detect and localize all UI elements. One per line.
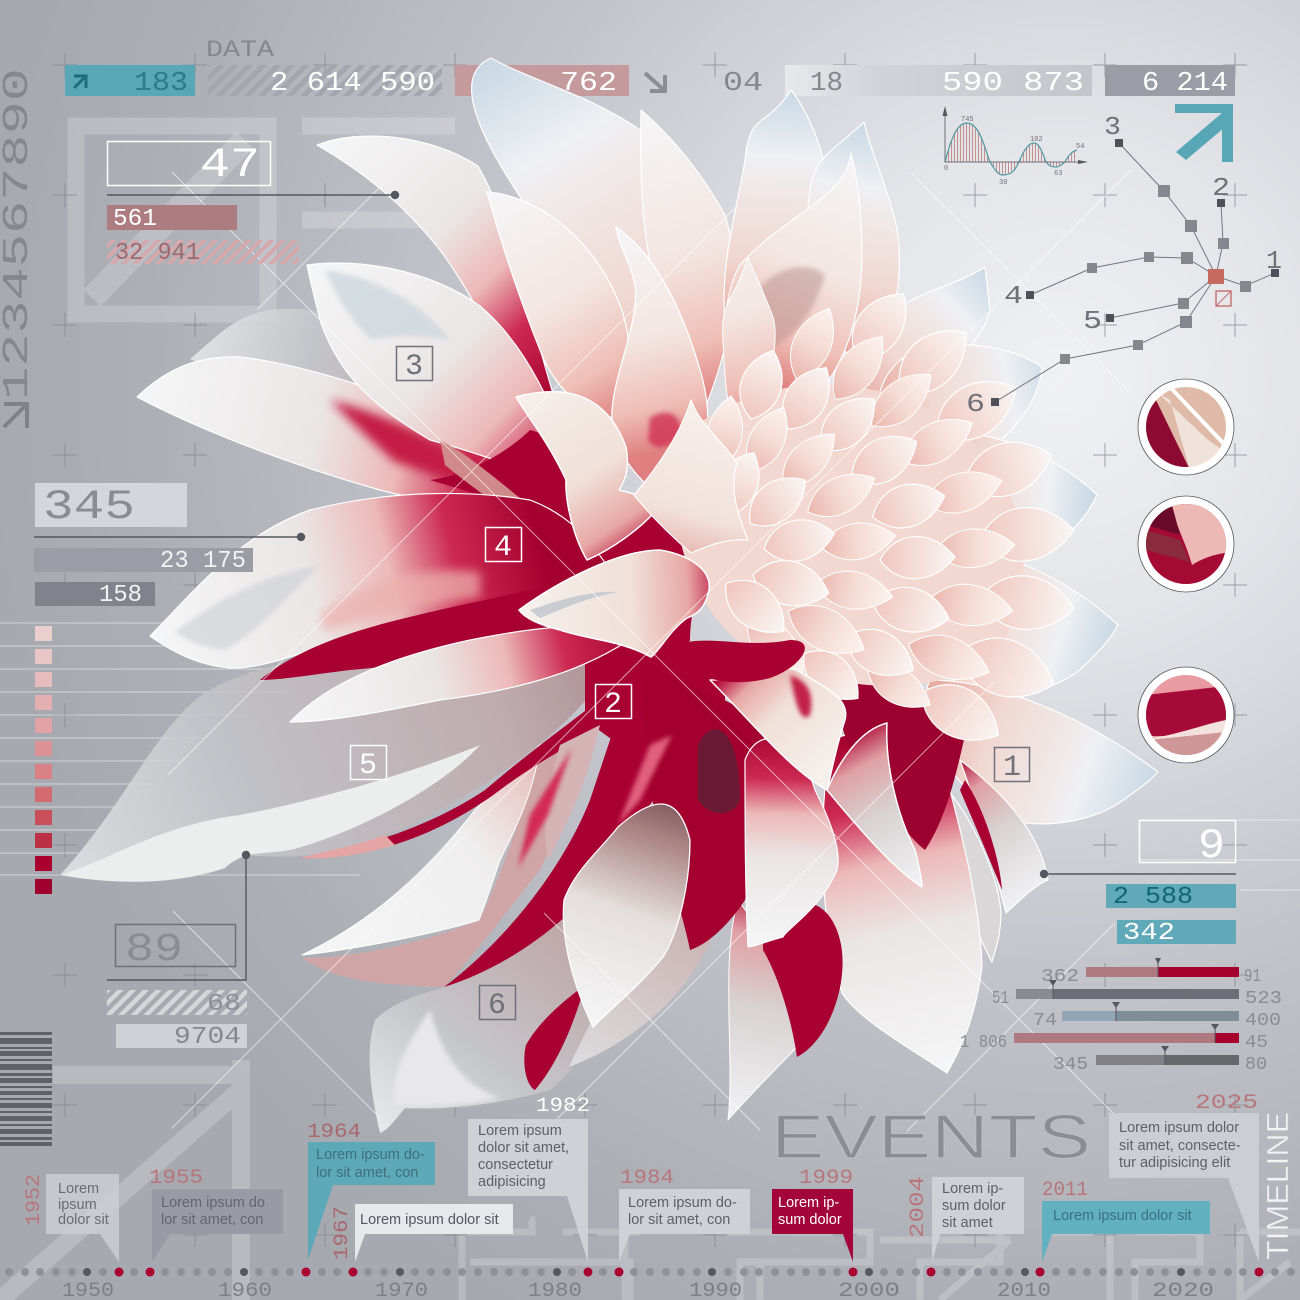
marker 1 <box>994 748 1030 785</box>
callout 2004: Lorem ip- <box>942 1181 1003 1197</box>
callout 1964: 1964 <box>307 1121 361 1144</box>
network diagram: 5 <box>1083 306 1102 336</box>
callout 1984: 1984 <box>620 1167 674 1190</box>
box 183 <box>65 65 195 99</box>
range bar 362 / 91 <box>1041 958 1261 987</box>
callout 1964: Lorem ipsum do- <box>316 1147 425 1163</box>
leader lines with dots <box>34 192 1236 980</box>
sine chart: 0 <box>944 165 948 173</box>
box 18 and 590 873: 590 873 <box>942 69 1084 99</box>
petal D <box>745 739 838 947</box>
panel: 47 data block: 47 <box>200 141 260 189</box>
callout 1984: lor sit amet, con <box>628 1212 730 1228</box>
marker 2: 2 <box>604 688 622 722</box>
callout 2004: sit amet <box>942 1215 993 1231</box>
petal four crimson <box>150 493 610 668</box>
petal below four <box>260 590 660 680</box>
small petals ring three <box>730 344 955 714</box>
panel: 47 data block: 561 <box>113 206 157 233</box>
range bar 1 806 / 45: 1 806 <box>960 1033 1007 1053</box>
callout 2011 <box>1042 1179 1210 1262</box>
back petals top and right <box>472 58 1158 824</box>
callout 1955: Lorem ipsum do <box>161 1195 265 1211</box>
callout 2025 <box>1109 1092 1259 1262</box>
callout 2011: Lorem ipsum dolor sit <box>1053 1208 1192 1224</box>
marker 3: 3 <box>405 350 423 384</box>
network diagram: 6 <box>966 389 985 419</box>
timeline decade labels <box>62 1280 1214 1300</box>
lower right petals <box>823 732 1048 1073</box>
callout 1999: Lorem ip- <box>778 1195 839 1211</box>
callout 1955: lor sit amet, con <box>161 1212 263 1228</box>
box 2 614 590 <box>208 65 442 99</box>
fold shade <box>530 592 620 618</box>
callout 1967: Lorem ipsum dolor sit <box>360 1212 499 1228</box>
callout 2004 <box>907 1176 1024 1262</box>
icon: strip arrow <box>4 404 27 428</box>
callout 1964: lor sit amet, con <box>316 1165 418 1181</box>
pink blush centre of petal <box>648 413 682 447</box>
lower crimson swoosh <box>665 640 805 682</box>
range bar 51 / 523: 51 <box>992 989 1009 1009</box>
callout 1955 <box>149 1167 283 1262</box>
thin white guide lines <box>168 170 1131 1131</box>
marker 5 <box>350 746 386 783</box>
box 2 614 590: 2 614 590 <box>270 69 435 99</box>
timeline dots <box>5 1268 1295 1276</box>
small petals ring one <box>704 444 838 648</box>
faded long petal behind <box>190 309 540 480</box>
zero badge <box>1216 291 1231 306</box>
callout 1955: 1955 <box>149 1167 203 1190</box>
narrow flame <box>723 257 775 430</box>
box 6 214: 6 214 <box>1142 69 1228 99</box>
range bar 51 / 523: 523 <box>1245 989 1282 1009</box>
callout 2025: tur adipisicing elit <box>1119 1155 1230 1171</box>
top row data strip <box>65 65 1235 99</box>
inner shadow of upper flame <box>750 267 825 355</box>
petal 6 crimson streak <box>524 985 585 1090</box>
grey sheen petal four <box>175 565 320 650</box>
range bar 74 / 400: 74 <box>1033 1011 1057 1031</box>
front petal upper left cream <box>516 392 659 560</box>
lower left petal 6 <box>370 860 600 1133</box>
callout 1964 <box>307 1121 435 1260</box>
callout 1967 <box>331 1204 513 1262</box>
callout 1952 <box>23 1174 119 1262</box>
panel: 345 data block <box>34 483 253 609</box>
front petal curl crimson tip <box>519 550 709 657</box>
panel: 345 data block: 23 175 <box>160 548 246 575</box>
box 18 and 590 873: 18 <box>810 69 843 99</box>
marker 3 <box>396 346 432 384</box>
callout 1982: consectetur <box>478 1157 553 1173</box>
panel: 89 data block <box>107 924 247 1051</box>
long left petal <box>137 357 590 540</box>
callout 1952: Lorem <box>58 1181 99 1197</box>
sine chart: 54 <box>1076 143 1084 151</box>
marker 5: 5 <box>359 749 377 783</box>
vertical digit strip <box>0 68 38 428</box>
callout 1982: adipisicing <box>478 1174 546 1190</box>
callout 1982: dolor sit amet, <box>478 1140 569 1156</box>
white tip of petal 5 <box>60 745 480 882</box>
network diagram: 3 <box>1104 112 1121 142</box>
range bar 1 806 / 45: 45 <box>1245 1033 1268 1053</box>
blue sheen petal 3 <box>325 270 450 340</box>
panel: right 9 block: 9 <box>1198 822 1225 870</box>
range bar 51 / 523 <box>992 980 1282 1009</box>
crimson inner heart <box>430 430 707 667</box>
callout 1982: Lorem ipsum <box>478 1123 562 1139</box>
crimson stripes lower left <box>300 650 725 987</box>
sine chart: 102 <box>1030 136 1043 144</box>
dark maroon centre <box>698 729 740 813</box>
panel: right 9 block: 342 <box>1123 920 1175 947</box>
horizontal scale lines left <box>0 623 1300 890</box>
front petal centre white <box>634 400 748 553</box>
panel: 345 data block: 158 <box>99 582 142 609</box>
cream front petal with grey tip <box>827 723 922 887</box>
dark crimson under right <box>835 668 965 850</box>
box 762 <box>455 65 629 99</box>
marker 1: 1 <box>1003 751 1021 785</box>
panel: 345 data block: 345 <box>43 483 135 531</box>
crimson backing behind marker 2 <box>585 650 725 760</box>
range bar 345 / 80: 80 <box>1245 1055 1267 1075</box>
marker 4: 4 <box>494 531 512 565</box>
rosy diagonal band <box>440 440 588 556</box>
panel: 89 data block: 68 <box>207 991 241 1018</box>
callout 1952: ipsum <box>58 1197 97 1213</box>
range bar 362 / 91: 91 <box>1244 967 1261 987</box>
white petal A <box>563 804 690 1027</box>
DATA heading: DATA <box>206 37 274 63</box>
pale petal behind white <box>569 800 717 1067</box>
small petals ring four <box>778 300 1016 721</box>
callout 1982 <box>468 1095 590 1262</box>
range bar 1 806 / 45 <box>960 1024 1268 1053</box>
marker 4 <box>486 528 522 565</box>
label 04: 04 <box>723 69 763 99</box>
range bar 74 / 400 <box>1033 1002 1281 1031</box>
sine chart: 745 <box>961 116 974 124</box>
upper centre petals <box>487 192 708 500</box>
small petals ring two <box>701 393 898 690</box>
heading: EVENTS: EVENTS <box>771 1103 1091 1172</box>
rose under-petal <box>302 745 580 987</box>
pink streak in fan <box>618 735 672 825</box>
top left petal <box>317 136 555 400</box>
network hub <box>1208 269 1224 284</box>
box 183: 183 <box>134 69 188 99</box>
white sheen on petal 6 <box>394 1010 500 1105</box>
panel: 47 data block <box>107 141 299 267</box>
white front lower left petal <box>302 745 540 955</box>
callout 2011: 2011 <box>1042 1179 1088 1202</box>
callout 1984: Lorem ipsum do- <box>628 1195 737 1211</box>
box 6 214 <box>1105 65 1235 99</box>
central cream mass <box>676 385 1023 686</box>
callout 1967: 1967 <box>331 1206 354 1260</box>
sine chart <box>942 106 1088 187</box>
marker 2 <box>596 684 632 722</box>
box 18 and 590 873 <box>785 65 1092 99</box>
faded large petal 5 <box>60 638 620 882</box>
flower: dahlia <box>60 58 1158 1133</box>
callout 1999 <box>772 1167 853 1262</box>
timeline callouts <box>23 1092 1259 1262</box>
callout 1952: 1952 <box>23 1174 46 1226</box>
panel: 89 data block: 89 <box>125 928 183 973</box>
bottom centre petals <box>563 660 843 1120</box>
colour scale swatches <box>35 626 52 894</box>
front lower pink petal <box>710 668 846 790</box>
network diagram <box>966 112 1282 419</box>
panel: right 9 block: 2 588 <box>1113 884 1193 911</box>
circle three <box>1138 667 1234 763</box>
range bars <box>960 958 1282 1075</box>
callout 2025: Lorem ipsum dolor <box>1119 1120 1239 1136</box>
callout 1952: dolor sit <box>58 1212 109 1228</box>
crimson flare on pink petal <box>790 675 811 717</box>
crimson streak <box>330 400 500 495</box>
callout 2004: sum dolor <box>942 1198 1006 1214</box>
callout 1999: sum dolor <box>778 1212 842 1228</box>
small petals ring five <box>837 281 1077 757</box>
circle one <box>1138 379 1234 475</box>
range bar 362 / 91: 362 <box>1041 967 1079 987</box>
crimson centre band <box>640 660 765 950</box>
icon: large teal arrow <box>1175 104 1233 162</box>
panel: right 9 block <box>1106 820 1236 947</box>
marker 6 <box>480 986 516 1023</box>
numbered markers on petals <box>350 346 1030 1023</box>
callout 1982: 1982 <box>536 1095 590 1118</box>
icon: down right arrow <box>645 73 665 91</box>
network diagram: 2 <box>1212 173 1230 203</box>
circle two <box>1138 496 1234 592</box>
range bar 345 / 80 <box>1053 1046 1267 1075</box>
detail circles <box>1138 379 1234 763</box>
range bar 74 / 400: 400 <box>1245 1011 1281 1031</box>
marker 6: 6 <box>488 989 506 1023</box>
panel: 89 data block: 9704 <box>174 1024 241 1051</box>
network diagram: 1 <box>1266 246 1282 276</box>
range bar 345 / 80: 345 <box>1053 1055 1088 1075</box>
callout 2025: 2025 <box>1195 1092 1258 1115</box>
network diagram: 4 <box>1004 281 1023 311</box>
heading: TIMELINE: TIMELINE <box>1260 1112 1295 1260</box>
panel: 47 data block: 32 941 <box>115 240 200 267</box>
barcode <box>0 1032 52 1146</box>
callout 1984 <box>619 1167 750 1262</box>
callout 1999: 1999 <box>799 1167 853 1190</box>
box 762: 762 <box>560 69 617 99</box>
callout 2004: 2004 <box>907 1176 930 1238</box>
pink wash petal four <box>320 570 480 632</box>
petal label 3 base <box>307 263 560 480</box>
callout 2025: sit amet, consecte- <box>1119 1138 1241 1154</box>
crimson lobe <box>763 903 843 1057</box>
sine chart: 63 <box>1054 170 1062 178</box>
sine chart: 30 <box>999 179 1007 187</box>
